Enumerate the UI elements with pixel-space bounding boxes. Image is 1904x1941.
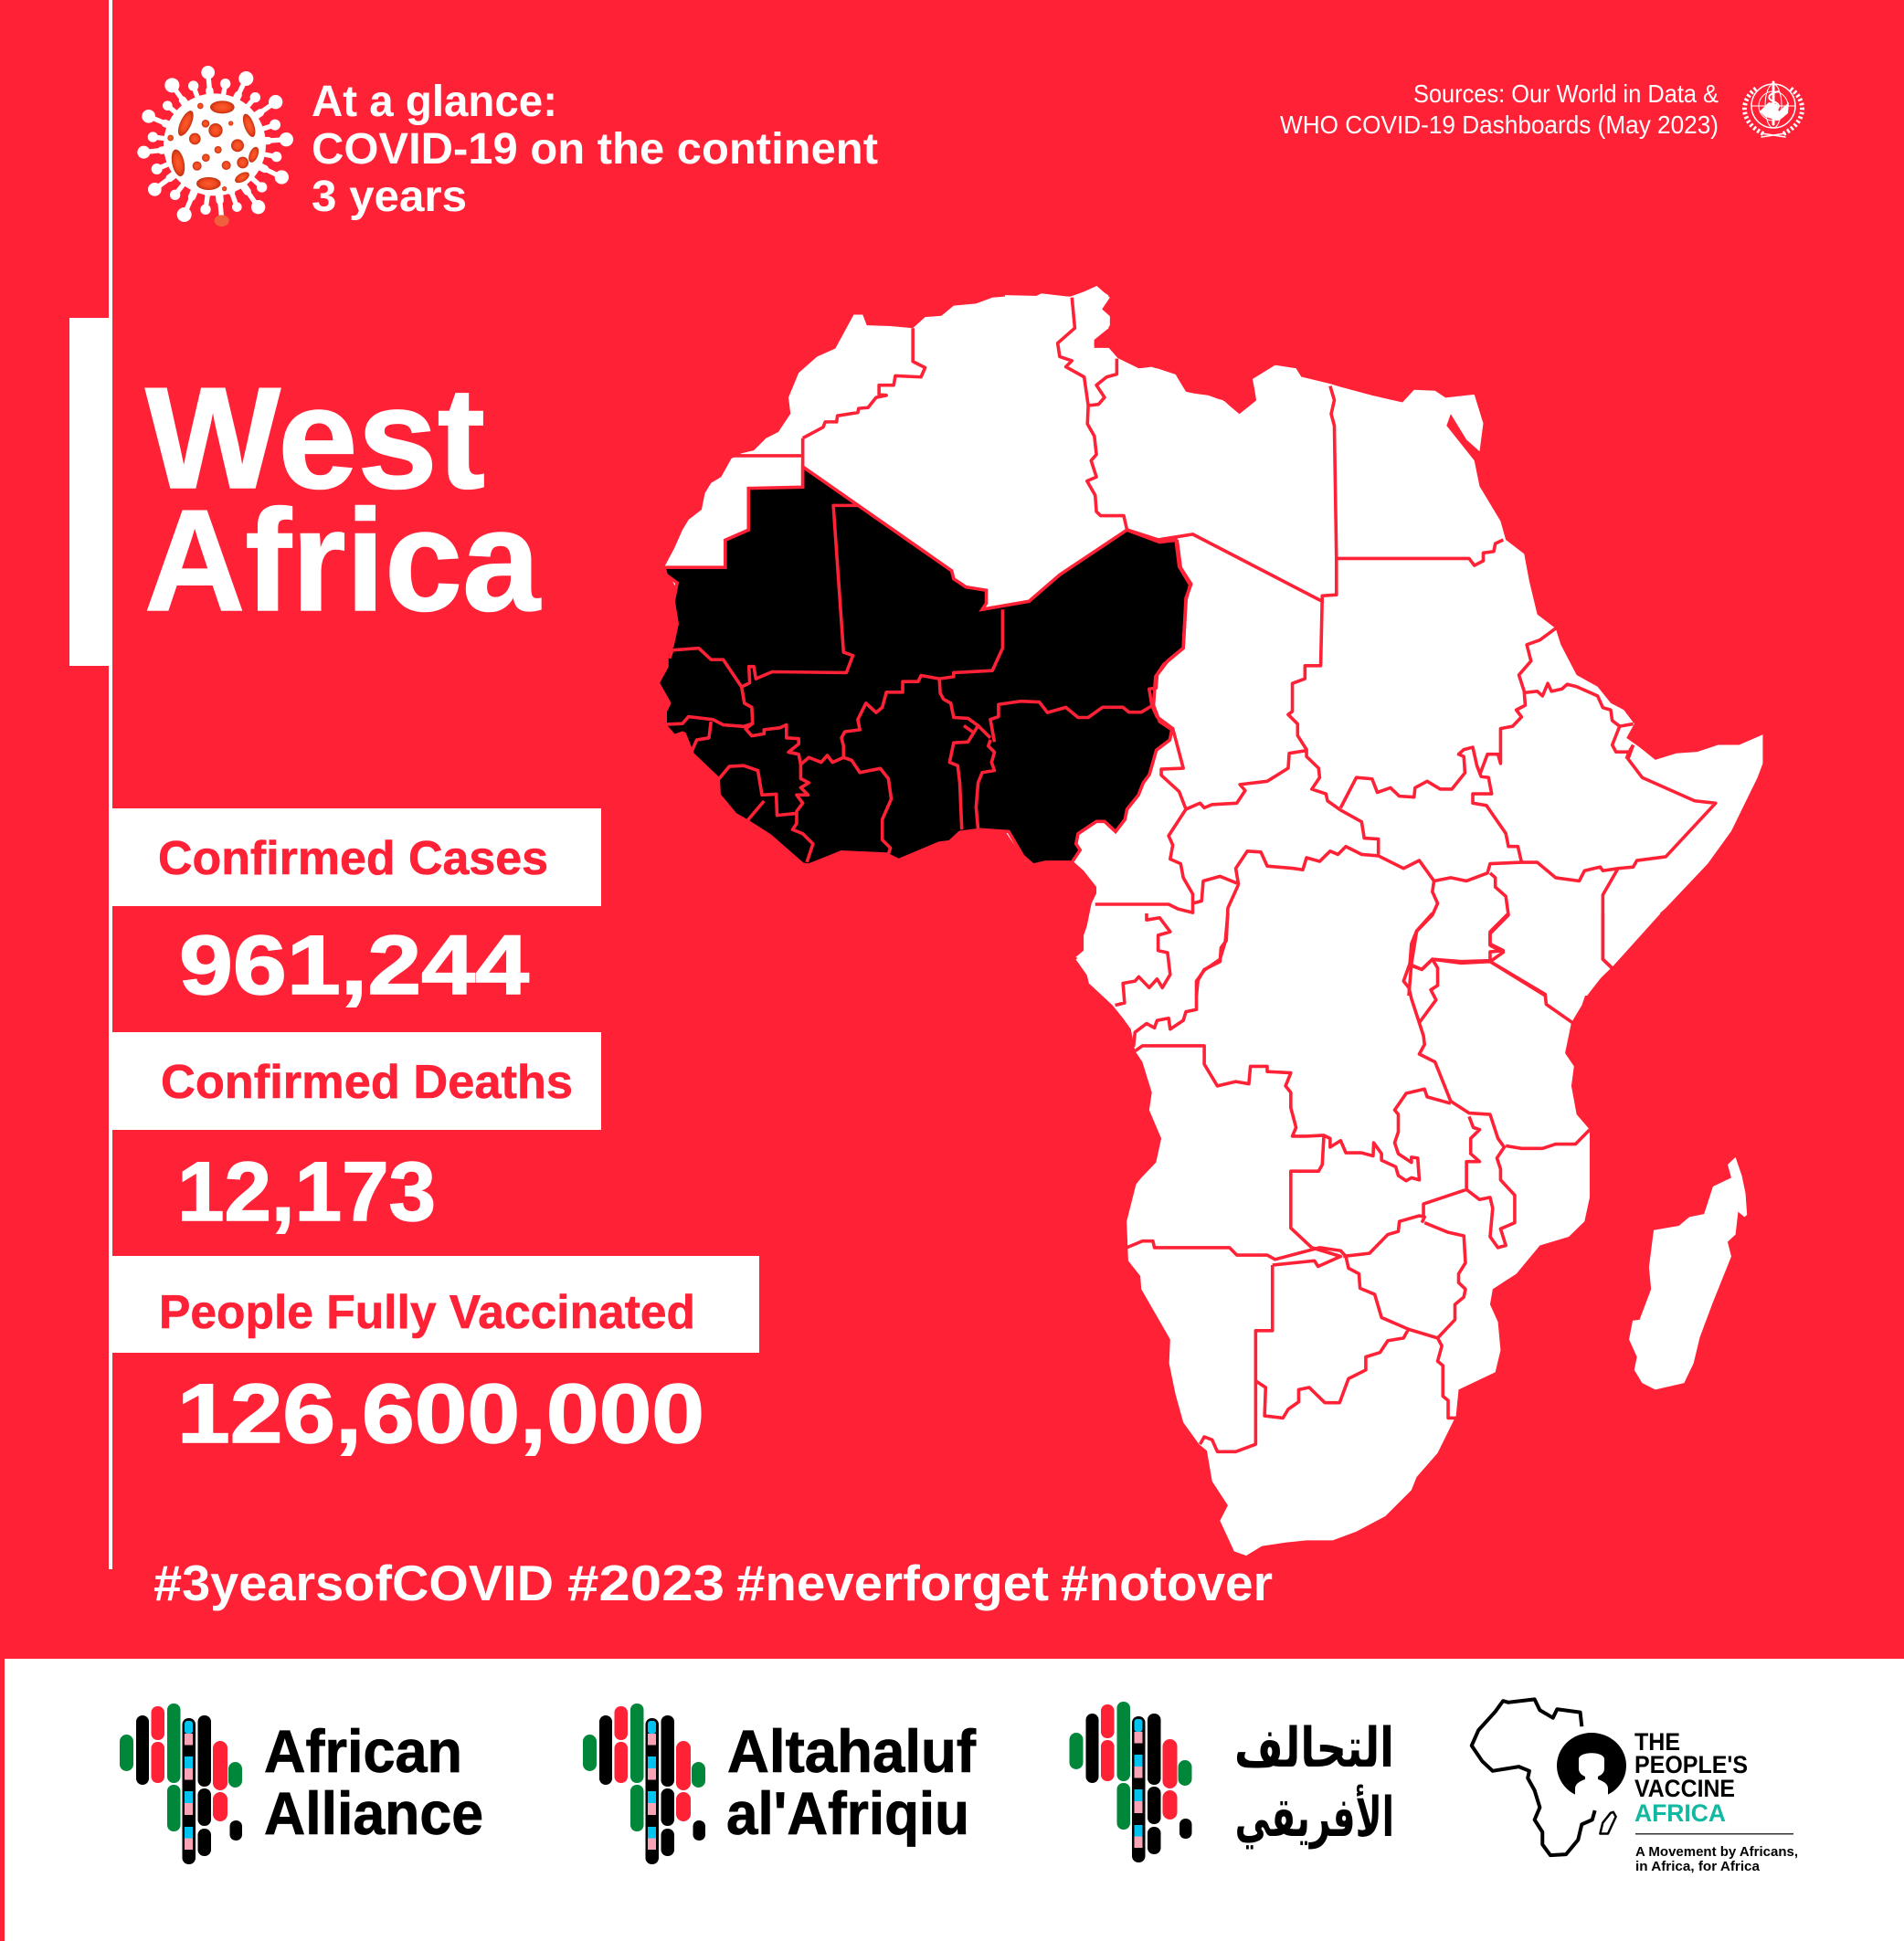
logo wordmark: Alliance: [264, 1779, 483, 1847]
title: West Africa: Africa: [144, 480, 541, 641]
land: north-west Africa: [664, 288, 1261, 904]
stat: confirmed cases: [109, 808, 601, 1012]
sources note: Sources: Our World in Data &: [1413, 79, 1719, 108]
wordmark: AFRICA: [1634, 1799, 1726, 1827]
stat: confirmed cases: Confirmed Cases: [158, 832, 548, 885]
stat: people fully vaccinated: 126,600,000: [177, 1367, 704, 1461]
stat: confirmed deaths: 12,173: [177, 1145, 436, 1239]
logo wordmark: [726, 1717, 977, 1847]
map: Africa: [658, 286, 1762, 1556]
logo wordmark: [264, 1717, 483, 1847]
logo wordmark: [1234, 1718, 1394, 1850]
map outline: [1472, 1699, 1616, 1855]
logo mark: [583, 1704, 705, 1864]
logo wordmark: الأفريقي: [1235, 1783, 1394, 1850]
divider and tagline: A Movement by Africans,: [1635, 1844, 1798, 1860]
logo wordmark: African: [264, 1717, 462, 1785]
country borders: central and east: [1095, 386, 1716, 996]
hashtags: #notover: [1061, 1555, 1273, 1611]
heading: at a glance: At a glance:: [312, 78, 557, 126]
sources note: [1280, 79, 1719, 139]
heading: at a glance: [312, 78, 878, 221]
land: southern Africa: [1075, 913, 1661, 1556]
title accent bar: [69, 318, 112, 666]
logo mark: [120, 1704, 242, 1864]
wordmark: THE: [1634, 1728, 1680, 1756]
title: West Africa: [144, 358, 541, 641]
logo mark: [1069, 1702, 1191, 1862]
stat: people fully vaccinated: [109, 1256, 759, 1461]
logo wordmark: التحالف: [1234, 1718, 1394, 1778]
title: West Africa: West: [145, 358, 485, 519]
highlighted region: West Africa: [658, 467, 1190, 865]
land: north-east Africa and Horn: [1005, 286, 1762, 996]
logo: African Alliance: [120, 1704, 483, 1864]
heading: at a glance: COVID-19 on the continent: [312, 125, 878, 174]
land: Madagascar: [1629, 1157, 1747, 1389]
icon: coronavirus: [137, 66, 293, 227]
left vertical rule: [109, 0, 112, 1569]
footer band: [5, 1659, 1904, 1941]
divider and tagline: [1635, 1833, 1798, 1874]
hashtags: [153, 1555, 1273, 1611]
logo wordmark: Altahaluf: [727, 1717, 977, 1785]
heading: at a glance: 3 years: [312, 173, 467, 221]
wordmark: PEOPLE'S: [1634, 1751, 1748, 1778]
divider and tagline: in Africa, for Africa: [1635, 1859, 1761, 1874]
stat: confirmed cases: 961,244: [179, 919, 529, 1012]
hashtags: #2023: [567, 1555, 725, 1611]
country borders: southern: [1116, 913, 1613, 1451]
logo wordmark: al'Afriqiu: [726, 1779, 969, 1847]
logo: Altahaluf al'Afriqiu: [583, 1704, 977, 1864]
logo: The People's Vaccine Africa: [1472, 1699, 1798, 1874]
hashtags: #3yearsofCOVID: [153, 1555, 554, 1611]
hashtags: #neverforget: [736, 1555, 1049, 1611]
wordmark: [1634, 1728, 1748, 1827]
stat: confirmed deaths: Confirmed Deaths: [161, 1056, 573, 1109]
wordmark: VACCINE: [1634, 1775, 1735, 1802]
logo: Arabic African Alliance: [1069, 1702, 1394, 1862]
stat: confirmed deaths: [109, 1032, 601, 1239]
country borders: west and north: [665, 298, 1151, 862]
icon: WHO emblem: [1744, 82, 1803, 137]
stat: people fully vaccinated: People Fully Vaccinated: [159, 1286, 695, 1339]
silhouette in circle: [1557, 1733, 1626, 1799]
sources note: WHO COVID-19 Dashboards (May 2023): [1280, 111, 1719, 139]
